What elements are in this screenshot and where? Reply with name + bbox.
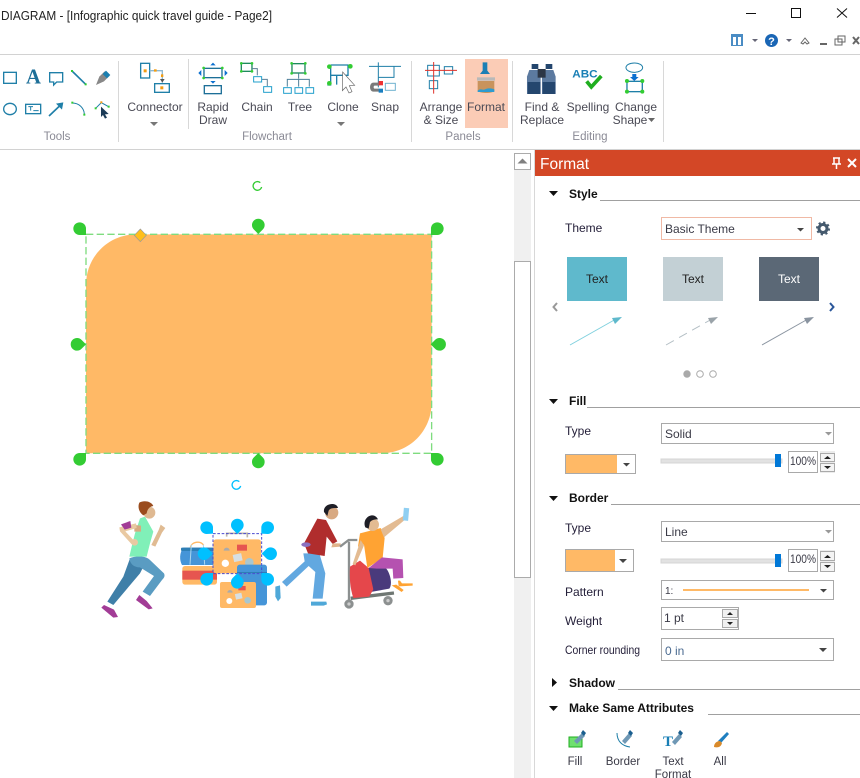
- ribbon group: panels: Format: [467, 100, 506, 114]
- icon: border eyedropper: [617, 730, 633, 747]
- ribbon group: flowchart: Flowchart: [242, 131, 293, 143]
- phone: [403, 508, 409, 521]
- ribbon group: flowchart: Tree: [288, 100, 312, 114]
- theme swatches: Text: [682, 272, 705, 286]
- ribbon group: panels: Panels: [445, 131, 481, 143]
- ribbon frame: [0, 54, 860, 150]
- section: make same attributes: Make Same Attributes: [569, 701, 694, 715]
- theme arrows: [570, 317, 814, 345]
- format panel header: [535, 150, 860, 176]
- section: fill: Fill: [569, 394, 586, 408]
- ribbon group: tools: A: [26, 67, 41, 89]
- pattern row: [565, 580, 834, 600]
- shoes: [101, 605, 118, 618]
- selection dashed outline: [86, 234, 432, 453]
- window controls: [746, 8, 847, 18]
- ribbon group: editing: Editing: [572, 131, 608, 143]
- ribbon group: flowchart: Rapid: [197, 100, 229, 114]
- arms: [119, 523, 137, 545]
- illustration: luggage: [180, 519, 277, 608]
- back leg: [107, 558, 146, 605]
- ribbon group: panels: [420, 62, 506, 143]
- border opacity slider: [661, 550, 835, 572]
- large suitcase: [213, 533, 261, 573]
- torso: [129, 517, 153, 557]
- action labels: Border: [606, 756, 640, 768]
- fill opacity slider: [661, 451, 835, 473]
- blue suitcase: [237, 565, 267, 605]
- ribbon group: editing: Find &: [525, 100, 559, 114]
- corner rounding row: 0 in: [665, 644, 684, 658]
- icon: text eyedropper: [663, 730, 683, 750]
- ribbon group: flowchart: Draw: [199, 113, 227, 127]
- section: border: Border: [569, 491, 609, 505]
- connector button: [127, 63, 183, 126]
- format panel header: Format: [540, 156, 590, 173]
- orange bag: [182, 566, 217, 585]
- theme dropdown: [662, 218, 812, 240]
- pattern row: 1:: [665, 586, 673, 597]
- ribbon group: editing: Replace: [520, 113, 564, 127]
- border colour picker: [566, 550, 634, 572]
- passenger: [358, 528, 385, 568]
- illustration: runner: [101, 501, 165, 618]
- blue duffel bag: [180, 542, 220, 565]
- section: style: Style: [569, 187, 598, 201]
- green selection handles: [71, 219, 446, 468]
- ribbon group: tools: Tools: [44, 131, 71, 143]
- man torso: [304, 519, 337, 556]
- green rotate handle: [253, 182, 262, 190]
- connector button: Connector: [127, 100, 183, 114]
- ribbon group: flowchart: Chain: [241, 100, 273, 114]
- ribbon help controls: ?: [768, 36, 775, 48]
- man legs: [282, 553, 325, 599]
- section: style: [549, 187, 860, 378]
- section: fill: [549, 394, 860, 474]
- format panel border: [534, 150, 535, 778]
- yellow corner adjust handle: [134, 229, 146, 242]
- icon: all brush: [714, 732, 729, 747]
- man head: [325, 506, 338, 519]
- theme swatches: [567, 257, 819, 301]
- icon: fill eyedropper: [569, 730, 586, 747]
- ribbon help controls: [731, 34, 859, 48]
- ribbon group: editing: ABC: [572, 68, 598, 80]
- red and purple luggage: [367, 566, 391, 592]
- cyan selection handles: [198, 519, 277, 589]
- weight row: 1 pt: [664, 611, 685, 625]
- section: shadow: [552, 676, 860, 690]
- theme swatches: Text: [586, 272, 609, 286]
- ribbon group: flowchart: [197, 62, 401, 143]
- section: shadow: Shadow: [569, 676, 616, 690]
- section: fill: Type: [565, 424, 591, 438]
- fill opacity slider: 100%: [790, 456, 816, 468]
- carousel chevrons: [554, 303, 834, 311]
- ribbon group: tools: [4, 67, 110, 143]
- pattern row: Pattern: [565, 585, 604, 599]
- ribbon group: editing: [520, 63, 657, 143]
- corner rounding row: [565, 638, 834, 660]
- action labels: Fill: [568, 756, 582, 768]
- ribbon group: flowchart: Clone: [327, 100, 359, 114]
- title bar text: DIAGRAM - [Infographic quick travel guide - Page2]: [1, 9, 272, 23]
- ribbon group: editing: Change: [615, 100, 657, 114]
- ribbon group: panels: & Size: [424, 113, 459, 127]
- action labels: Text: [662, 756, 684, 768]
- weight row: Weight: [565, 614, 603, 628]
- format button highlight: [465, 59, 508, 128]
- carousel dots: [683, 370, 716, 378]
- shape body: [86, 234, 432, 453]
- section: border: Line: [665, 525, 688, 539]
- cyan rotate handle: [232, 481, 241, 489]
- section: border: [549, 491, 860, 660]
- fill colour picker: [566, 454, 636, 474]
- section: style: Theme: [565, 221, 603, 235]
- border opacity slider: 100%: [790, 554, 816, 566]
- small suitcase: [220, 582, 256, 608]
- action labels: All: [714, 756, 726, 768]
- theme dropdown: Basic Theme: [665, 222, 735, 236]
- ribbon group: editing: Spelling: [567, 100, 609, 114]
- action labels: [568, 756, 726, 778]
- theme swatches: Text: [778, 272, 801, 286]
- section: make same attributes: [549, 701, 860, 778]
- corner rounding row: Corner rounding: [565, 643, 640, 657]
- illustration: man pushing trolley with passenger: [275, 504, 413, 609]
- ribbon group: editing: Shape: [613, 113, 648, 127]
- section: fill: Solid: [665, 427, 692, 441]
- section: border: Type: [565, 521, 591, 535]
- weight row: [565, 608, 738, 630]
- icon: text eyedropper: T: [663, 734, 673, 750]
- selected orange rounded shape: [71, 182, 446, 489]
- blue selection outline: [213, 534, 262, 574]
- trolley: [340, 540, 357, 600]
- ribbon group: flowchart: Snap: [371, 100, 399, 114]
- icon: gear: [817, 222, 829, 234]
- ribbon group: panels: Arrange: [420, 100, 463, 114]
- canvas vertical scrollbar: [514, 153, 531, 778]
- head: [143, 507, 155, 519]
